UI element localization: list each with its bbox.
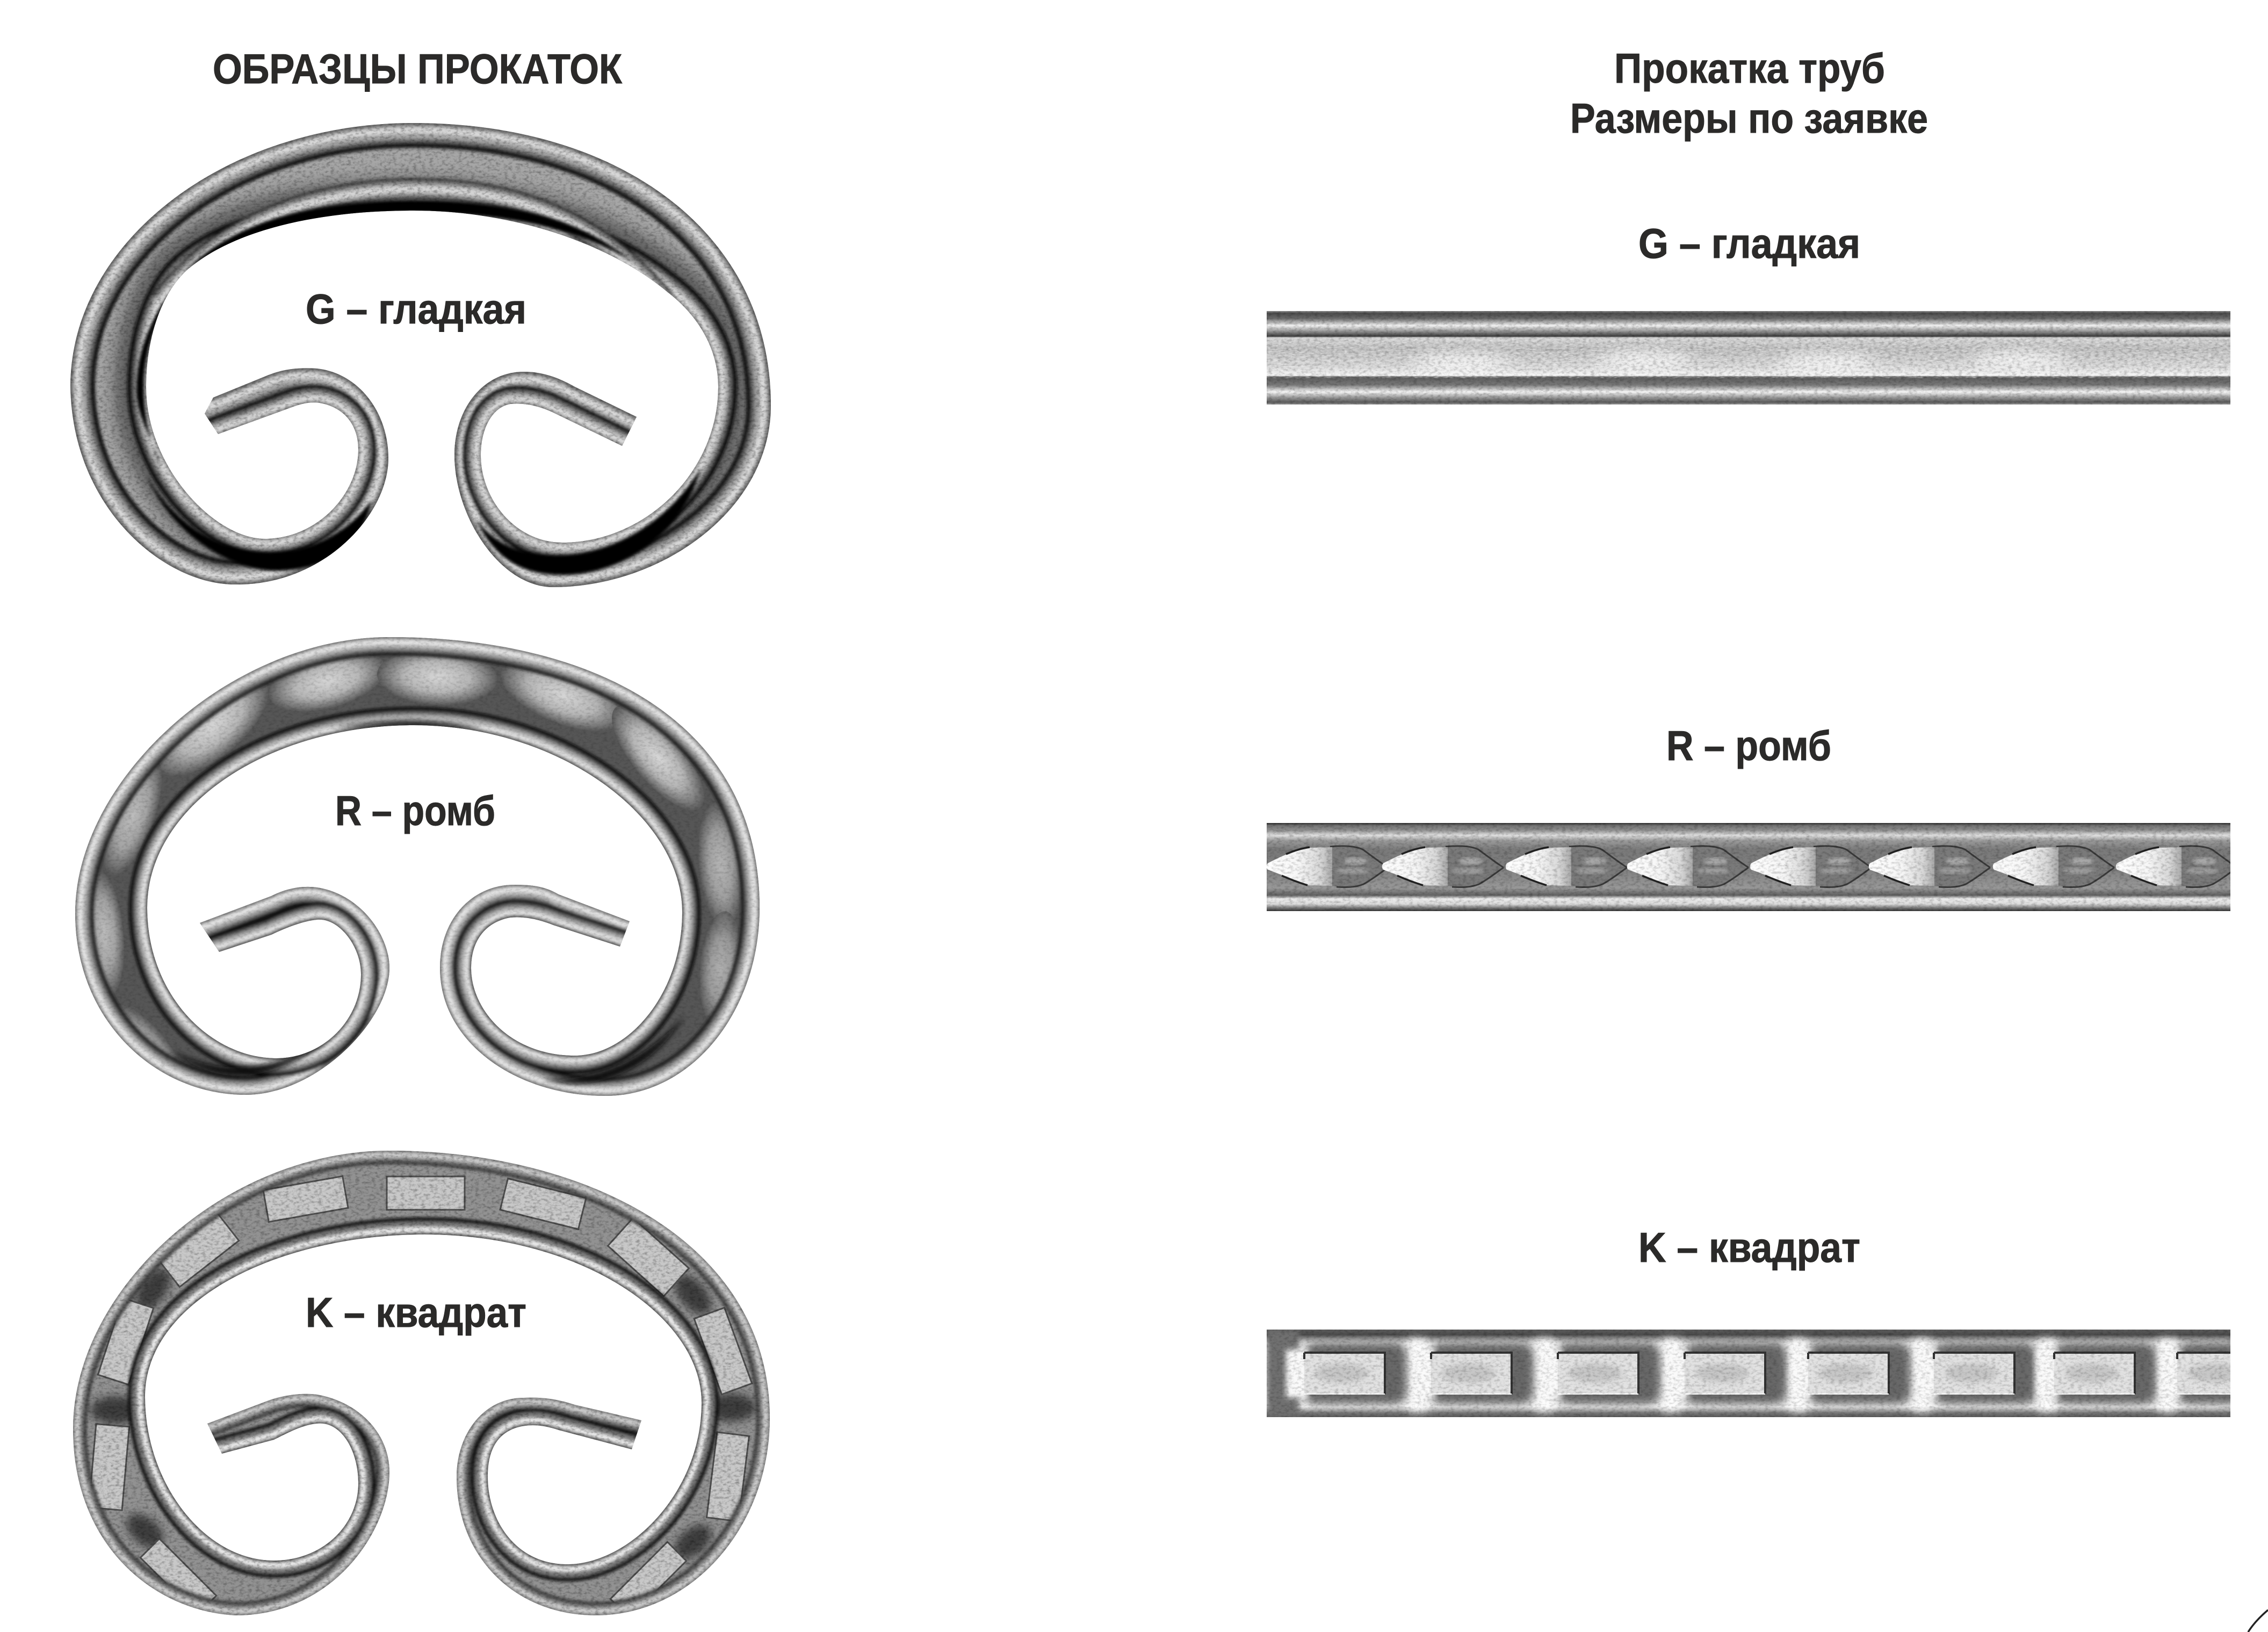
- scroll sample: R rhombus: [70, 634, 763, 1099]
- label: R rhombus (tube): R – ромб: [1666, 722, 1831, 769]
- heading: right column title: Размеры по заявке: [1570, 95, 1928, 142]
- label: G smooth (scroll): G – гладкая: [306, 285, 526, 333]
- label: K square (tube): K – квадрат: [1638, 1224, 1860, 1271]
- corner mark: arc at bottom right: [2248, 1610, 2268, 1632]
- label: K square (scroll): K – квадрат: [306, 1289, 526, 1336]
- heading: right column title: Прокатка труб: [1614, 45, 1885, 92]
- tube strip: R rhombus: [1267, 823, 2237, 911]
- heading: right column title: [1570, 45, 1928, 142]
- tube strip: G smooth: [1267, 311, 2230, 405]
- label: R rhombus (scroll): R – ромб: [335, 787, 495, 834]
- scroll sample: K square: [70, 1147, 774, 1620]
- scroll sample: G smooth: [67, 121, 776, 591]
- label: G smooth (tube): G – гладкая: [1638, 220, 1860, 267]
- heading: left column title: ОБРАЗЦЫ ПРОКАТОК: [213, 45, 622, 92]
- tube strip: K square: [1267, 1330, 2268, 1417]
